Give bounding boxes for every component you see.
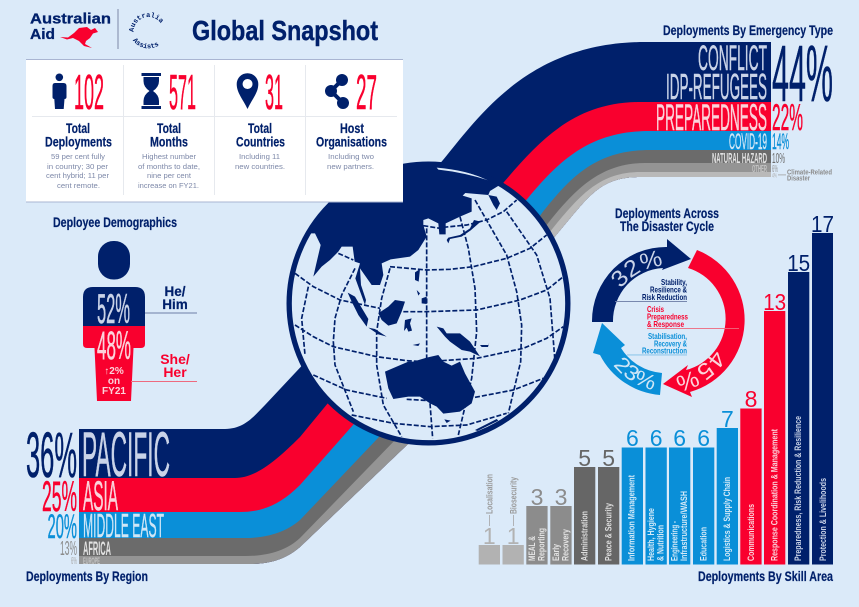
panel: headline statistics	[26, 59, 403, 202]
stat: total deployments	[45, 66, 112, 190]
bar: localisation: Localisation	[484, 474, 494, 514]
bar: preparedness and risk reduction	[787, 250, 810, 564]
stat: total months	[138, 66, 200, 190]
region labels and percentages: 6%	[71, 556, 77, 567]
stat: host organisations	[316, 66, 387, 171]
emergency type labels and percentages: 4%	[772, 174, 777, 180]
stat: total months: Highest number	[142, 152, 197, 161]
bar: communications: Communications	[746, 504, 756, 561]
region labels and percentages: EUROPE	[83, 556, 100, 566]
region labels and percentages	[26, 419, 170, 567]
arc: stability 32%: 32%	[612, 250, 662, 286]
legend: stabilisation: Stabilisation,	[648, 331, 687, 341]
stat: total deployments: cent remote.	[57, 181, 100, 190]
panel: headline statistics: 102	[74, 66, 104, 120]
bar: protection and livelihoods: Protection & Livelihoods	[818, 478, 828, 561]
bar: peace and security	[598, 445, 619, 564]
legend: crisis: Preparedness	[647, 312, 688, 322]
logo: Australian Aid: Aid	[30, 26, 55, 43]
bar: response coordination: 13	[763, 289, 786, 315]
bar: engineering	[669, 425, 690, 564]
bar: localisation: 1	[483, 523, 496, 549]
bar: education	[693, 425, 714, 564]
bar: information management	[622, 425, 643, 564]
bar chart: deployments by skill area	[479, 211, 834, 564]
bar: health, hygiene and nutrition: 6	[650, 425, 663, 451]
bar: biosecurity	[502, 477, 524, 564]
bar: response coordination	[763, 289, 786, 564]
region labels and percentages: 13%	[60, 538, 77, 560]
stat: total countries: Total	[248, 121, 272, 136]
bar: preparedness and risk reduction: 15	[787, 250, 810, 276]
arc: stability 32%	[592, 239, 691, 322]
bar: early recovery: Recovery	[560, 529, 570, 561]
bar: MEAL and reporting: 3	[531, 484, 543, 510]
logo: Australia Assists: Assists	[132, 38, 158, 48]
emergency type labels and percentages: 10%	[772, 150, 785, 167]
legend: stabilisation: Recovery &	[654, 338, 687, 348]
bar: MEAL and reporting: Reporting	[536, 528, 546, 561]
bar: protection and livelihoods	[811, 211, 834, 564]
stat: total countries: Countries	[236, 134, 285, 150]
ribbon: deployments by emergency type	[400, 42, 771, 300]
bar: response coordination: Response Coordination & Management	[770, 429, 780, 561]
bar: health, hygiene and nutrition: Health, Hygiene	[646, 508, 656, 561]
stat: total deployments: cent hybrid; 11 per	[46, 171, 110, 180]
legend: stabilisation	[627, 331, 687, 356]
heading: deployee demographics: Deployee Demographics	[53, 215, 177, 230]
stat: total countries: Including 11	[239, 152, 280, 161]
text: PACIFIC	[82, 420, 170, 490]
bar: information management: 6	[626, 425, 639, 451]
heading: disaster cycle: Deployments Across	[615, 206, 719, 221]
bar: education: Education	[698, 527, 708, 561]
bar: MEAL and reporting	[526, 484, 548, 564]
emergency type labels and percentages: 14%	[772, 129, 789, 154]
icon: hourglass	[142, 73, 161, 109]
bar: early recovery	[550, 484, 572, 564]
icon: person	[52, 74, 66, 109]
logo: Australia Assists: Australia	[129, 12, 163, 32]
panel: headline statistics: 31	[265, 66, 283, 120]
icon: share nodes	[325, 74, 349, 109]
arc: stabilisation 23%: 23%	[614, 358, 654, 390]
label: he/him: He/	[164, 284, 186, 299]
bar: peace and security: Peace & Security	[604, 503, 614, 561]
icon: map pin	[237, 73, 258, 109]
arc: crisis 45%	[663, 250, 745, 397]
label: he/him: Him	[162, 297, 188, 312]
bar: health, hygiene and nutrition	[646, 425, 667, 564]
label: she/her: She/	[160, 351, 190, 367]
bar: engineering: Infrastructure/WASH	[679, 491, 689, 561]
bar: engineering: 6	[673, 425, 686, 451]
logo: Australian Aid: Australian	[30, 10, 111, 28]
legend: crisis: & Response	[647, 319, 684, 329]
stat: total countries: new countries.	[235, 162, 285, 171]
bar: localisation	[479, 474, 500, 564]
stat: total months: increase on FY21.	[138, 181, 199, 190]
legend: crisis: Crisis	[647, 304, 664, 314]
bar: information management: Information Management	[626, 475, 636, 561]
stat: host organisations: new partners.	[327, 162, 374, 171]
stat: total deployments: Total	[66, 121, 90, 136]
bar: health, hygiene and nutrition: & Nutrition	[655, 525, 665, 561]
bar: MEAL and reporting: MEAL &	[527, 536, 537, 561]
stat: total deployments: in country; 30 per	[47, 162, 109, 171]
bar: early recovery: 3	[555, 484, 567, 510]
emergency type labels and percentages: COVID-19	[729, 129, 767, 154]
chart: disaster cycle ring	[592, 239, 745, 397]
heading: disaster cycle	[615, 206, 719, 234]
label: she/her	[131, 351, 197, 382]
bar: logistics and supply chain: Logistics & Supply Chain	[722, 477, 732, 561]
stat: host organisations: Host	[340, 121, 364, 136]
bar: biosecurity: 1	[507, 523, 519, 549]
logo: Australia Assists	[118, 9, 163, 49]
emergency type labels and percentages: 22%	[772, 97, 803, 138]
legend: stability: Risk Reduction	[642, 292, 687, 302]
stat: total months: nine per cent	[147, 171, 191, 180]
emergency type labels and percentages: 6%	[772, 164, 778, 175]
stat: total deployments: Deployments	[45, 134, 112, 150]
emergency type labels and percentages: Disaster	[787, 174, 810, 182]
bar: protection and livelihoods: 17	[811, 211, 834, 237]
figure: deployee gender split: 48%	[97, 324, 131, 368]
bar: communications	[740, 386, 762, 564]
icon: kangaroo	[60, 27, 98, 48]
stat: total months: Total	[157, 121, 181, 136]
region labels and percentages: 36%	[26, 419, 77, 491]
region labels and percentages: AFRICA	[83, 539, 111, 560]
bar: early recovery: Early	[551, 544, 561, 561]
panel: headline statistics: 571	[169, 66, 196, 120]
emergency type labels and percentages: OTHER	[752, 164, 767, 175]
figure: deployee gender split: 52%	[97, 285, 130, 332]
region labels and percentages: ASIA	[83, 472, 118, 519]
bar: administration: 5	[578, 445, 591, 471]
region labels and percentages: 25%	[42, 473, 77, 521]
figure: deployee gender split: FY21	[102, 386, 126, 397]
figure: deployee gender split: on	[108, 376, 120, 387]
stat: total months: of months to date,	[138, 162, 200, 171]
stat: host organisations: Organisations	[316, 134, 387, 150]
label: she/her: Her	[163, 364, 187, 380]
title: Global Snapshot	[192, 15, 378, 46]
region labels and percentages: 20%	[48, 508, 77, 546]
emergency type labels and percentages: NATURAL HAZARD	[712, 150, 767, 167]
emergency type labels and percentages: Climate-Related	[787, 168, 832, 176]
legend: stability: Stability,	[661, 277, 687, 287]
stat: total countries	[235, 66, 285, 171]
bar: peace and security: 5	[602, 445, 615, 471]
bar: communications: 8	[745, 386, 757, 412]
bar: engineering: Engineering -	[670, 521, 680, 561]
globe map of Asia-Pacific	[280, 162, 570, 445]
legend: stability: Resilience &	[650, 284, 687, 294]
stat: total deployments: 59 per cent fully	[51, 152, 105, 161]
bar: administration: Administration	[580, 511, 590, 561]
bar: logistics and supply chain	[717, 406, 738, 564]
text: MIDDLE EAST	[83, 507, 164, 544]
label: he/him	[145, 284, 197, 314]
emergency type labels and percentages	[656, 29, 833, 182]
bar: preparedness and risk reduction: Preparedness, Risk Reduction & Resilience	[793, 416, 803, 561]
bar: logistics and supply chain: 7	[721, 406, 734, 432]
arc: crisis 45%: 45%	[676, 352, 722, 391]
bar: administration	[574, 445, 595, 564]
legend: stability	[615, 277, 687, 302]
arc: stabilisation 23%	[593, 323, 662, 395]
stat: host organisations: 27	[356, 66, 377, 120]
bar: education: 6	[697, 425, 710, 451]
heading: disaster cycle: The Disaster Cycle	[620, 219, 714, 234]
legend: crisis	[647, 304, 739, 329]
stat: host organisations: Including two	[328, 152, 374, 161]
bar: biosecurity: Biosecurity	[508, 477, 518, 514]
legend: stabilisation: Reconstruction	[642, 346, 687, 356]
ribbon: deployments by region	[79, 325, 440, 564]
heading: region: Deployments By Region	[26, 569, 148, 584]
figure: deployee gender split: ↑2%	[104, 366, 124, 377]
stat: total months: Months	[150, 134, 188, 150]
figure: deployee gender split	[83, 241, 145, 401]
logo: Australian Aid	[30, 10, 111, 48]
